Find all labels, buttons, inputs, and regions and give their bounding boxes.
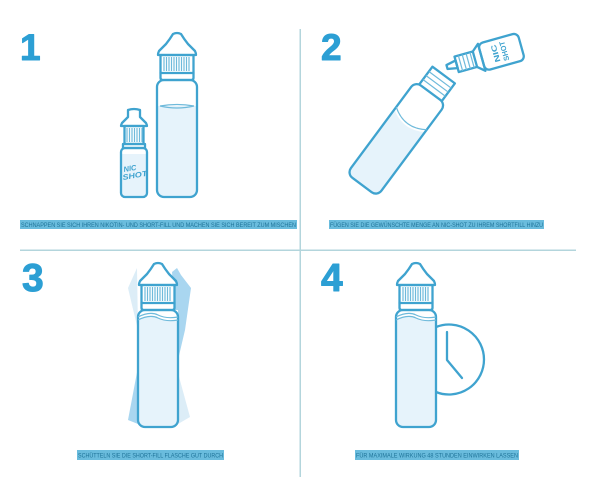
caption 4 [355,450,519,460]
step number 4: 4 [321,257,343,300]
caption 1 [20,220,297,229]
step number 3: 3 [22,257,44,300]
icon: shake motion shadows [128,268,191,424]
panel: step 4 [321,257,519,460]
caption 1: SCHNAPPEN SIE SICH IHREN NIKOTIN- UND SHORT-FILL UND MACHEN SIE SICH BEREIT ZUM MISCHEN [21,222,296,229]
icon: resting bottle [396,263,436,427]
bottle label text: NIC [123,163,138,174]
icon: tall short-fill bottle [157,33,197,197]
divider: horizontal [20,250,576,251]
panel: step 2 [321,27,544,229]
divider: vertical [300,29,301,477]
panel: step 3 [22,257,224,460]
panel: step 1 [20,27,297,229]
icon: bottle being shaken [138,263,178,427]
caption 4: FÜR MAXIMALE WIRKUNG 48 STUNDEN EINWIRKEN LASSEN [356,452,518,460]
caption 3 [77,450,224,460]
caption 2 [329,220,544,229]
icon: nicotine shot pouring [443,33,525,80]
bottle label text: NIC [489,43,502,63]
icon: clock [436,324,484,395]
icon: open bottle tilted [347,64,459,196]
step number 1: 1 [20,27,41,68]
caption 3: SCHÜTTELN SIE DIE SHORT-FILL FLASCHE GUT DURCH [78,452,223,460]
bottle label text: SHOT [497,40,511,62]
step number 2: 2 [321,27,342,68]
bottle label text: SHOT [122,168,150,182]
caption 2: FÜGEN SIE DIE GEWÜNSCHTE MENGE AN NIC-SHOT ZU IHREM SHORTFILL HINZU [330,221,543,229]
icon: small nicotine shot bottle [121,109,150,197]
